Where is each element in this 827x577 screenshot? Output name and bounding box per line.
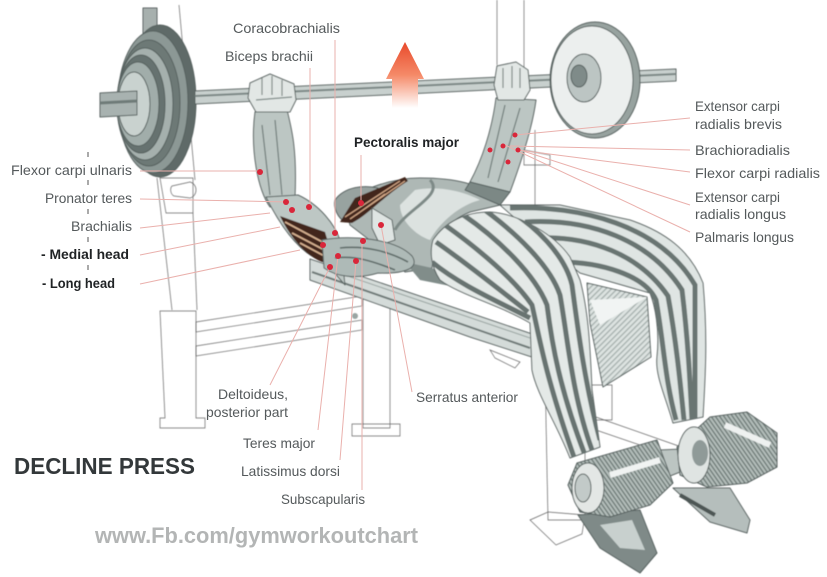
muscle labels: - Long head xyxy=(42,275,115,291)
left hand gripping bar xyxy=(248,74,296,112)
muscle labels: Teres major xyxy=(243,435,315,451)
left forearm xyxy=(253,110,295,207)
deltoid xyxy=(322,238,414,277)
muscle labels: Brachioradialis xyxy=(695,142,790,158)
right weight plate xyxy=(550,22,640,138)
muscle labels: Brachialis xyxy=(71,218,132,234)
muscle labels: Biceps brachii xyxy=(225,48,313,64)
left weight plates xyxy=(117,25,196,177)
right hand gripping bar xyxy=(494,62,530,100)
muscle marker dots xyxy=(257,132,520,270)
near foot roller xyxy=(568,440,673,517)
muscle labels: posterior part xyxy=(206,404,288,420)
barbell bar xyxy=(100,69,676,117)
near leg: striped trousers xyxy=(431,208,600,460)
label tick marks xyxy=(87,152,89,270)
muscle labels: Deltoideus, xyxy=(218,386,288,402)
muscle labels: Latissimus dorsi xyxy=(241,463,340,479)
website watermark: www.Fb.com/gymworkoutchart xyxy=(94,523,419,548)
foot roller axle xyxy=(660,448,705,478)
leader lines xyxy=(140,40,690,490)
muscle labels: Extensor carpi xyxy=(695,189,780,205)
muscle labels: radialis longus xyxy=(695,206,786,222)
muscle labels: Pronator teres xyxy=(45,190,132,206)
bench pad xyxy=(310,259,651,387)
far foot roller xyxy=(677,412,777,487)
muscle labels: - Medial head xyxy=(41,246,129,262)
title: DECLINE PRESS xyxy=(14,453,195,479)
muscle labels: Coracobrachialis xyxy=(233,20,340,36)
left upper arm xyxy=(266,195,345,285)
triceps xyxy=(280,216,334,262)
serratus anterior xyxy=(372,208,395,245)
muscle labels: radialis brevis xyxy=(695,116,782,132)
left arm xyxy=(253,110,414,285)
right post xyxy=(497,0,550,205)
muscle labels: Pectoralis major xyxy=(354,134,460,150)
far shoe xyxy=(673,488,750,533)
rear arm stub xyxy=(335,187,378,222)
pectoralis major muscle xyxy=(340,177,408,223)
muscle labels: Extensor carpi xyxy=(695,98,780,114)
muscle labels: Flexor carpi ulnaris xyxy=(11,162,132,178)
muscle labels: Palmaris longus xyxy=(695,229,794,245)
torso xyxy=(345,178,500,290)
far leg: striped trousers xyxy=(500,205,706,423)
right arm xyxy=(465,98,536,205)
muscle labels: Subscapularis xyxy=(281,491,365,507)
bench frame: rear legs and braces xyxy=(160,292,400,436)
arrow: upward press direction xyxy=(386,42,424,108)
icon: weight peg xyxy=(171,182,196,198)
lower bench support and foot xyxy=(530,370,690,545)
near shoe xyxy=(578,510,657,573)
left bench upright xyxy=(143,5,197,310)
muscle labels: Serratus anterior xyxy=(416,389,518,405)
muscle labels: Flexor carpi radialis xyxy=(695,165,820,181)
